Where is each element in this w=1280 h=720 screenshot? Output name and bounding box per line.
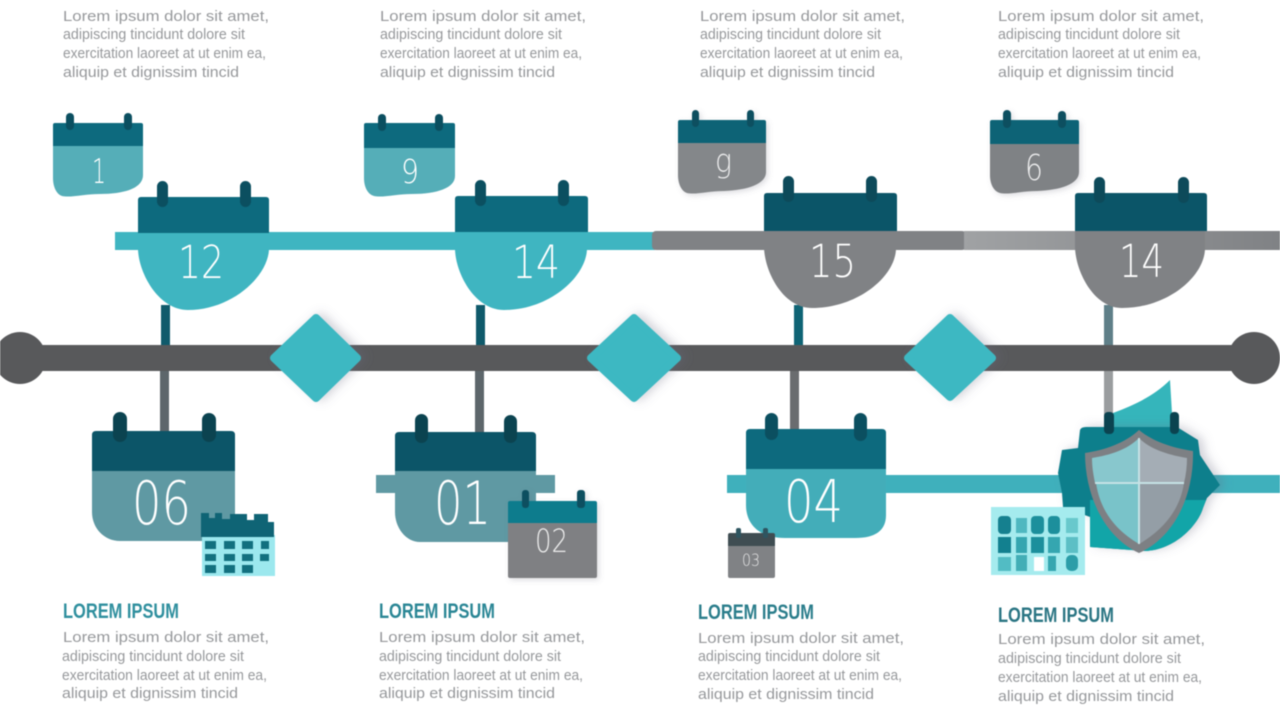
heading and text: bottom column 3: aliquip et dignissim tincid (698, 686, 874, 703)
text block: top column 2: aliquip et dignissim tincid (380, 64, 555, 81)
text block: top column 3: Lorem ipsum dolor sit amet, (700, 8, 905, 25)
connector stems (160, 305, 1113, 436)
calendar: 14 gray (1075, 177, 1207, 308)
text block: top column 3: aliquip et dignissim tincid (700, 64, 875, 81)
heading and text: bottom column 2: adipiscing tincidunt dolore sit (379, 648, 562, 665)
calendar: 01: 01 (434, 469, 491, 539)
calendar: 01 (376, 414, 555, 542)
text block: top column 4: adipiscing tincidunt dolore sit (998, 26, 1181, 43)
heading and text: bottom column 4: Lorem ipsum dolor sit amet, (998, 631, 1205, 648)
heading and text: bottom column 2: aliquip et dignissim tincid (379, 685, 555, 702)
text block: top column 2: Lorem ipsum dolor sit amet, (380, 8, 586, 25)
heading and text: bottom column 2: Lorem ipsum dolor sit amet, (379, 629, 585, 646)
text block: top column 2: adipiscing tincidunt dolore sit (380, 26, 563, 43)
small calendar: 9 (364, 114, 455, 197)
text block: top column 1: adipiscing tincidunt dolore sit (63, 26, 246, 43)
calendar: 06 (92, 412, 235, 541)
heading and text: bottom column 4: aliquip et dignissim tincid (998, 688, 1174, 705)
small calendar: g (678, 110, 766, 194)
diamond marker 3 (908, 318, 992, 397)
text block: top column 1: Lorem ipsum dolor sit amet, (63, 8, 269, 25)
calendar: 12: 12 (178, 236, 224, 289)
heading and text: bottom column 4: LOREM IPSUM (998, 604, 1114, 627)
small calendar: 6 (990, 110, 1079, 194)
heading and text: bottom column 2: LOREM IPSUM (379, 600, 495, 623)
small calendar: g: g (715, 142, 732, 180)
heading and text: bottom column 4: exercitation laoreet at ut enim ea, (998, 669, 1202, 686)
small calendar: 02 (508, 490, 597, 578)
small calendar: 1: 1 (92, 152, 106, 192)
text block: top column 4: aliquip et dignissim tincid (998, 64, 1174, 81)
heading and text: bottom column 1: Lorem ipsum dolor sit amet, (63, 629, 269, 646)
small calendar: 9: 9 (401, 152, 419, 191)
text block: top column 3 (700, 8, 905, 81)
icon: calendar grid panel (991, 507, 1085, 575)
text block: top column 2 (380, 8, 586, 81)
main timeline bar (0, 332, 1280, 384)
upper timeline band (115, 231, 1280, 250)
calendar: 04: 04 (784, 467, 843, 536)
text block: top column 4: exercitation laoreet at ut enim ea, (998, 45, 1201, 62)
small calendar: 1 (53, 113, 143, 197)
text block: top column 1: aliquip et dignissim tincid (63, 64, 239, 81)
heading and text: bottom column 1 (62, 600, 269, 702)
calendar: 14 teal: 14 (512, 236, 560, 289)
small calendar: 02: 02 (535, 522, 568, 560)
text block: top column 4: Lorem ipsum dolor sit amet, (998, 8, 1204, 25)
heading and text: bottom column 2 (379, 600, 585, 702)
heading and text: bottom column 3 (698, 601, 904, 703)
text block: top column 4 (998, 8, 1204, 81)
calendar: 14 teal (455, 180, 588, 310)
horizontal teal band: lower right (727, 475, 1280, 493)
small calendar: 6: 6 (1025, 148, 1043, 189)
calendar: 14 gray: 14 (1119, 235, 1164, 288)
heading and text: bottom column 1: adipiscing tincidunt dolore sit (62, 648, 245, 665)
calendar: 04 (746, 413, 886, 538)
small calendar: 03 (728, 528, 775, 578)
text block: top column 3: adipiscing tincidunt dolore sit (700, 26, 882, 43)
heading and text: bottom column 3: exercitation laoreet at ut enim ea, (698, 667, 902, 684)
heading and text: bottom column 3: Lorem ipsum dolor sit amet, (698, 630, 904, 647)
text block: top column 1: exercitation laoreet at ut enim ea, (63, 45, 266, 62)
text block: top column 3: exercitation laoreet at ut enim ea, (700, 45, 903, 62)
heading and text: bottom column 1: exercitation laoreet at ut enim ea, (62, 667, 267, 684)
heading and text: bottom column 1: LOREM IPSUM (63, 600, 179, 623)
calendar: 15: 15 (809, 235, 856, 288)
calendar: 12 (138, 181, 269, 310)
small icon: calendar grid (201, 513, 275, 576)
heading and text: bottom column 3: adipiscing tincidunt dolore sit (698, 648, 881, 665)
calendar: 15 (764, 176, 897, 308)
small calendar: 03: 03 (742, 551, 760, 571)
diamond marker 2 (591, 318, 677, 398)
heading and text: bottom column 1: aliquip et dignissim tincid (62, 685, 238, 702)
diamond marker 1 (274, 318, 357, 398)
heading and text: bottom column 4: adipiscing tincidunt dolore sit (998, 650, 1182, 667)
calendar: 06: 06 (132, 469, 191, 539)
text block: top column 2: exercitation laoreet at ut enim ea, (380, 45, 582, 62)
heading and text: bottom column 3: LOREM IPSUM (698, 601, 814, 624)
heading and text: bottom column 4 (998, 604, 1205, 705)
heading and text: bottom column 2: exercitation laoreet at ut enim ea, (379, 667, 583, 684)
icon: shield emblem on teal calendar (1058, 380, 1220, 553)
text block: top column 1 (63, 8, 269, 81)
